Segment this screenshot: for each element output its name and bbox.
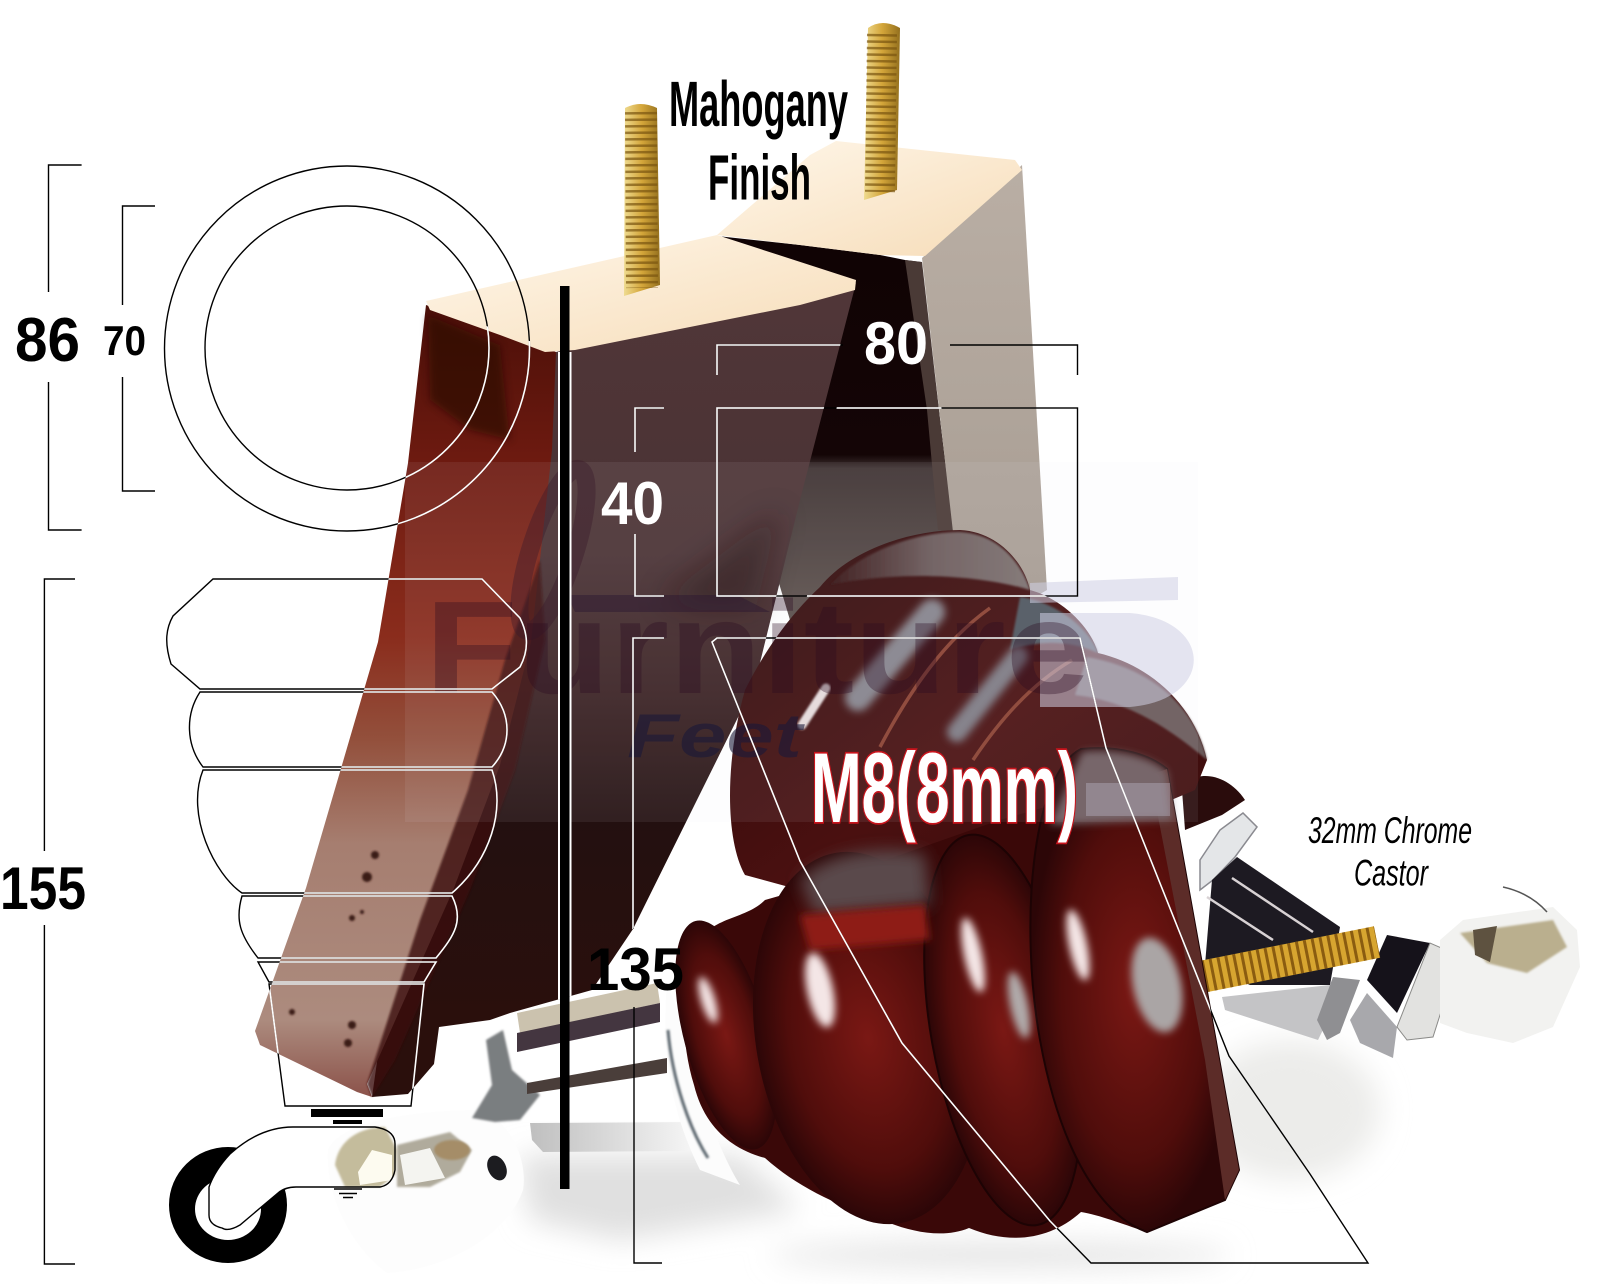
ball profile (712, 638, 1368, 1263)
chrome box (530, 1122, 695, 1152)
black square (1367, 935, 1430, 1013)
back leg light face (922, 165, 1047, 600)
86 dimension bracket (48, 165, 82, 530)
front leg dark side face (372, 283, 856, 1097)
castor lower rod (527, 1058, 667, 1094)
logo tail (1086, 783, 1170, 816)
label 32mm Chrome: 32mm Chrome (1308, 810, 1472, 851)
logo subword: Feet (627, 702, 805, 771)
watermark: Furniture Feet logo (405, 462, 1198, 822)
wheel cavity dark (1473, 926, 1497, 962)
line drawing: white strokes over dark wood (269, 326, 1212, 1228)
wheel cover arc (1503, 887, 1547, 912)
label Mahogany: Mahogany (669, 68, 848, 140)
dark spot (483, 1152, 511, 1184)
front leg dark rim (367, 560, 545, 1097)
wood specks (289, 851, 379, 1047)
label M8 thread size: M8(8mm) (811, 732, 1078, 843)
groove (880, 608, 990, 747)
label 135: 135 (587, 936, 684, 1003)
wheel cavity (1460, 920, 1567, 973)
label 70: 70 (103, 317, 146, 364)
top knob (830, 532, 1030, 590)
40 bracket (635, 408, 664, 596)
small neck (1182, 776, 1245, 830)
chrome flange (1317, 977, 1360, 1040)
chrome plate (1397, 943, 1453, 1040)
cavity highlight (358, 1150, 392, 1185)
flange white (665, 985, 740, 1185)
castor mounting bars (311, 1109, 383, 1124)
brass bolt (1196, 942, 1377, 978)
band two (898, 823, 1108, 1237)
135 bracket (633, 638, 664, 1263)
front wooden leg (255, 104, 856, 1097)
front leg top end grain (426, 235, 856, 352)
castor cavity left (335, 1127, 397, 1187)
logo script loop (506, 462, 600, 638)
back leg dark inner face (717, 236, 1010, 620)
red band reflection (800, 905, 930, 950)
front leg red face (255, 305, 556, 1097)
155 dimension bracket (44, 579, 75, 1264)
grey ring highlight (957, 656, 1018, 732)
back leg brass thread (864, 23, 900, 200)
right chrome castor (1196, 813, 1580, 1058)
castor wheel outline (169, 1127, 395, 1263)
left chrome castor (328, 983, 740, 1273)
logo word: Furniture (425, 574, 1090, 721)
label 155: 155 (0, 855, 86, 922)
castor wheel dome (328, 1110, 524, 1273)
chrome wheel (1440, 907, 1580, 1043)
ball base silhouette (684, 772, 1239, 1238)
castor dark bar (517, 1003, 660, 1052)
flange edge (668, 1030, 708, 1158)
end disc grey top (1050, 751, 1172, 825)
chrome lower stem (1222, 985, 1335, 1040)
grey ring highlight (858, 612, 932, 698)
black bracket (1205, 857, 1340, 985)
line drawing: black strokes (164, 166, 1368, 1263)
ball neck (655, 910, 797, 1160)
label 86: 86 (15, 306, 80, 375)
dark grain patch (428, 315, 510, 440)
ring outer 86 (164, 166, 530, 531)
chrome ring (1200, 813, 1257, 890)
logo swoosh (1040, 613, 1194, 707)
cavity tan blob (434, 1140, 470, 1160)
label 80: 80 (864, 310, 928, 377)
80 square outline (717, 408, 1078, 596)
cavity right light patches (400, 1148, 445, 1185)
chrome block (1350, 993, 1397, 1058)
bracket highlight (1207, 878, 1313, 940)
70 dimension bracket (122, 206, 155, 491)
front leg brass thread (624, 104, 660, 296)
logo swash right (1030, 577, 1178, 603)
upper bulb sheen (800, 850, 930, 915)
label Castor: Castor (1354, 852, 1429, 894)
label Finish: Finish (708, 142, 811, 214)
dark face shadow (660, 510, 780, 610)
label 40: 40 (601, 470, 664, 537)
highlights (694, 908, 1190, 1040)
80 width dimension bracket (717, 345, 1078, 375)
end face edge (1150, 769, 1239, 1200)
ring inner 70 (205, 206, 489, 490)
end disc (1030, 748, 1239, 1232)
watermark panel (405, 462, 1198, 822)
back leg top end grain (717, 141, 1022, 256)
main bulb (725, 833, 1011, 1243)
upper turned ball foot (730, 530, 1245, 890)
thick vertical divider (560, 286, 570, 1189)
third lobe (1075, 657, 1207, 760)
upper ball body (730, 530, 1207, 890)
logo swash bar (567, 595, 770, 612)
second lobe (1010, 597, 1098, 653)
white streak (802, 688, 826, 725)
lower turned ball foot (655, 748, 1239, 1243)
back wooden leg (717, 23, 1047, 620)
floor shadows (520, 1040, 1380, 1267)
castor stem (472, 1030, 540, 1122)
groove (973, 660, 1072, 760)
castor cavity right (397, 1132, 472, 1187)
back leg middle face (905, 260, 953, 532)
turned leg profile (167, 579, 526, 1106)
castor tan bar (517, 983, 660, 1033)
